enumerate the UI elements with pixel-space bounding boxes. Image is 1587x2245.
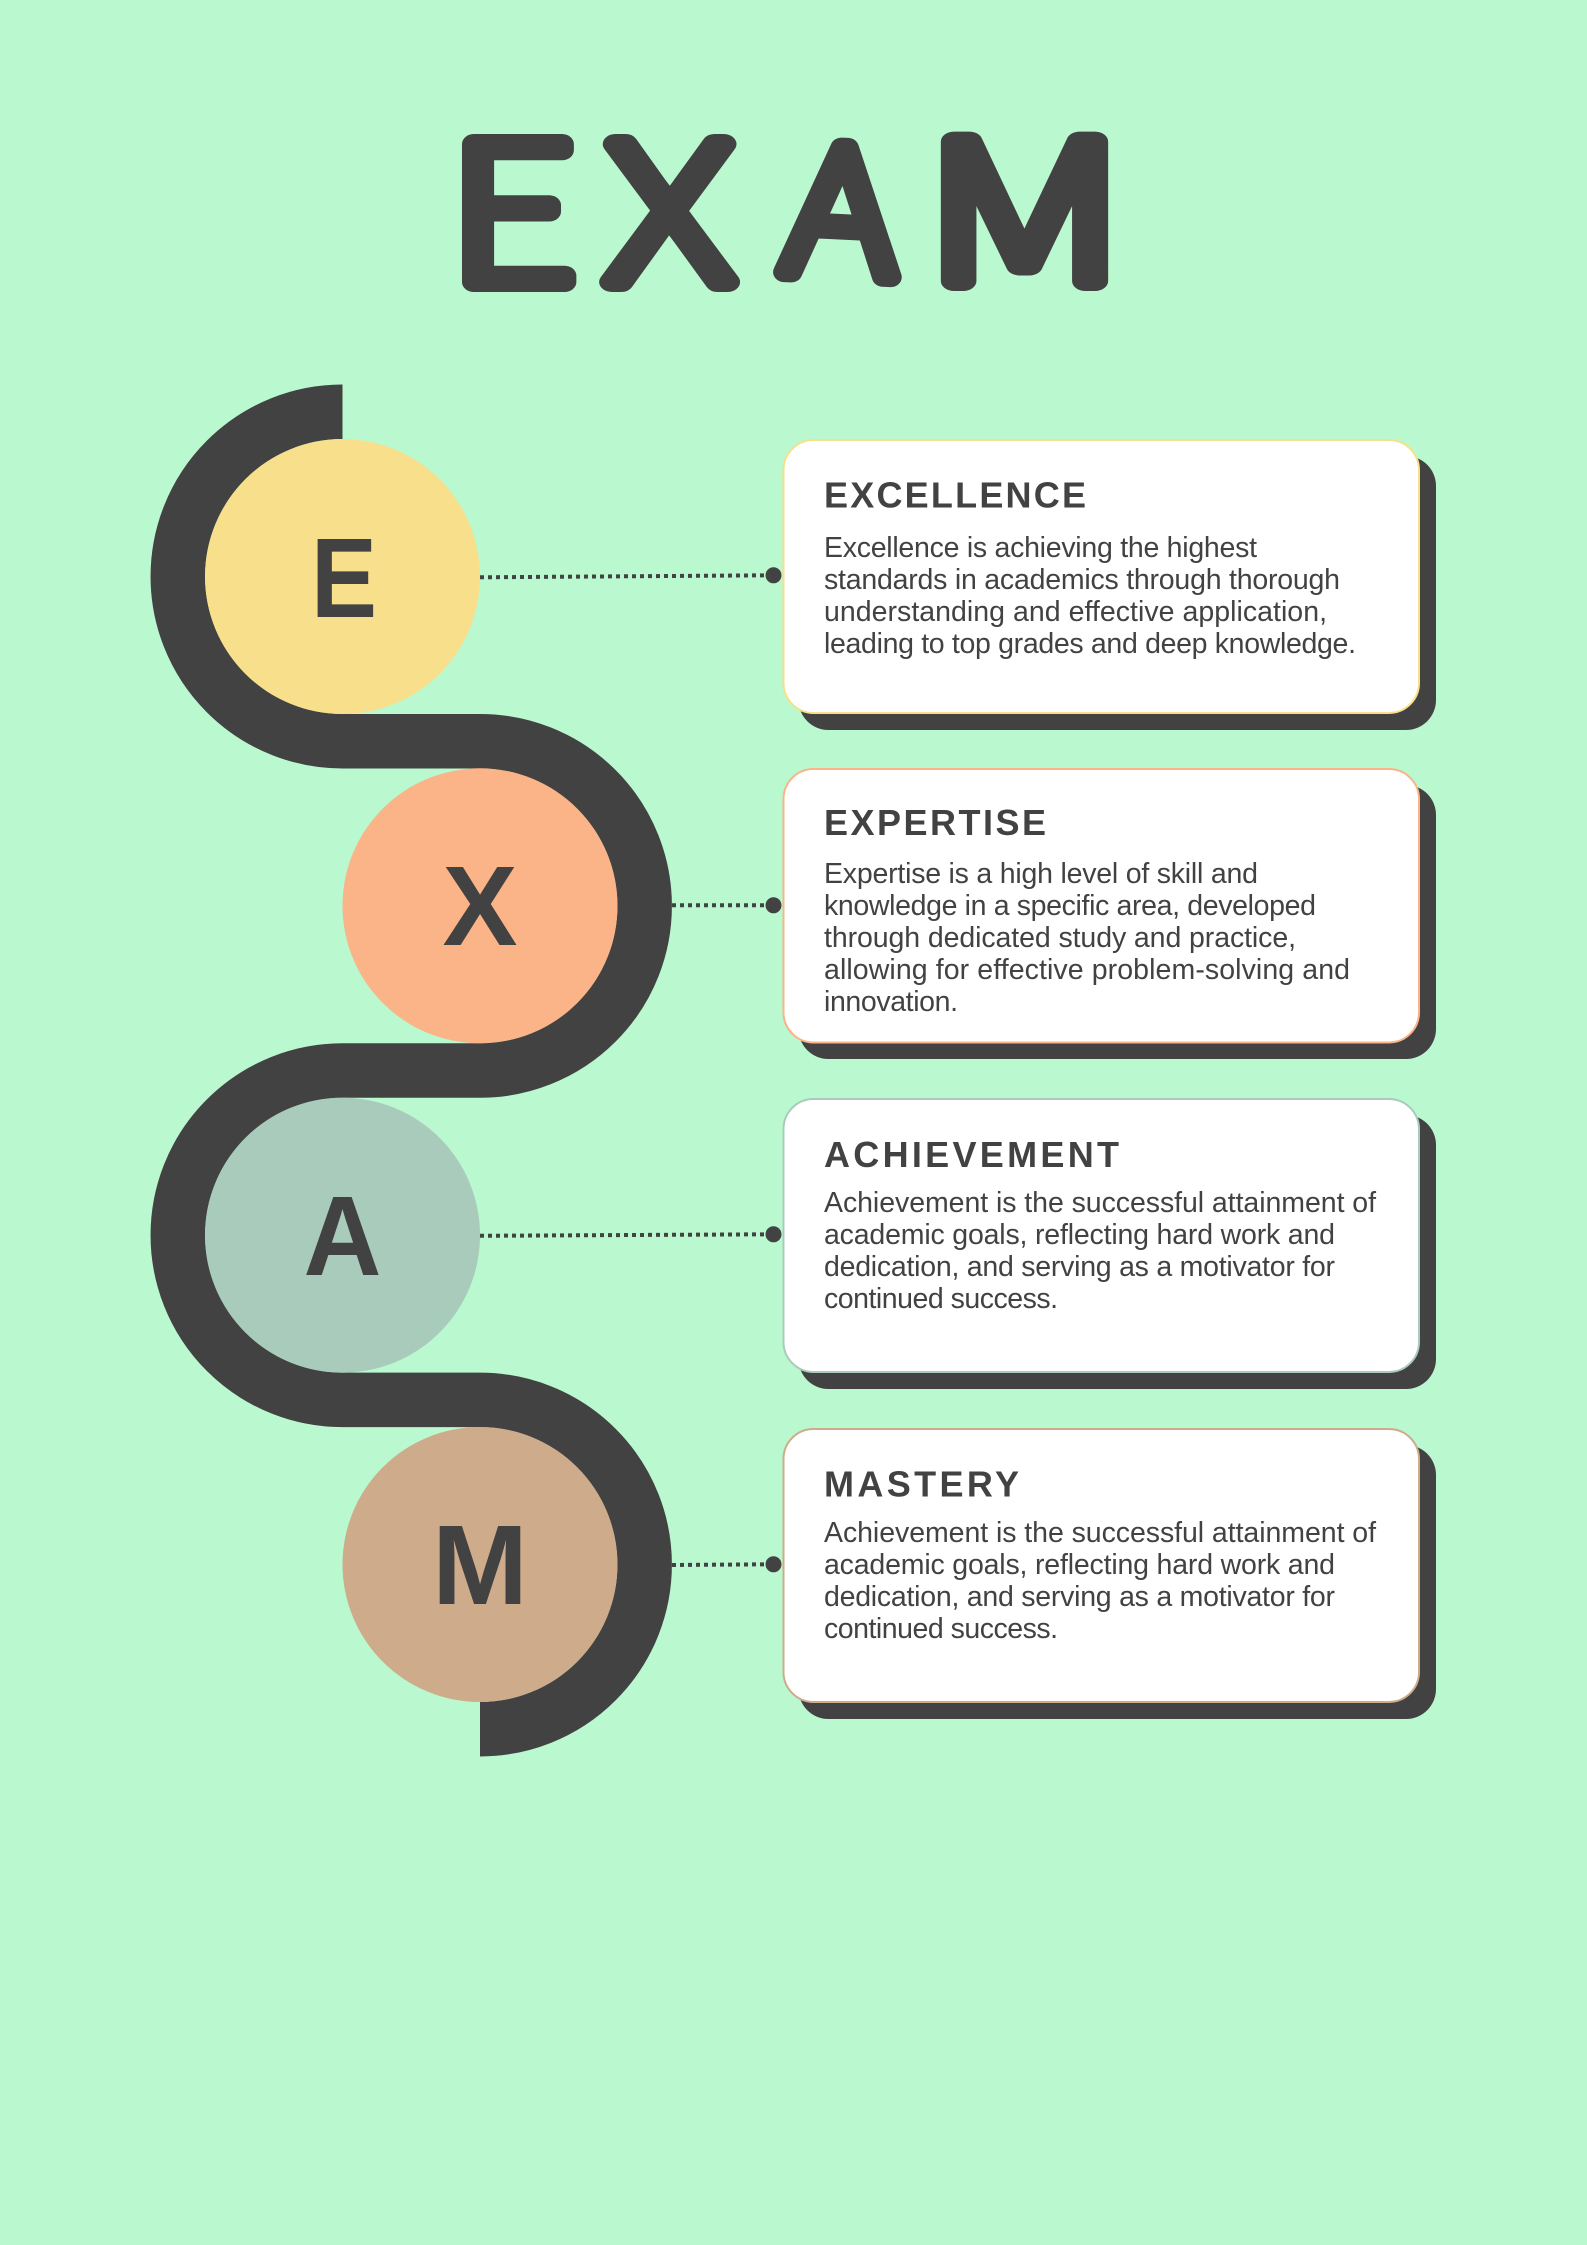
text: Expertise description: through dedicated study and practice, [824, 922, 1296, 954]
text: Mastery description [824, 1517, 1376, 1645]
circle: X [342, 768, 618, 1043]
circle: E: E [311, 515, 377, 641]
text: Mastery description: Achievement is the successful attainment of [824, 1517, 1376, 1549]
serpentine path [178, 412, 645, 1729]
heading: Mastery: MASTERY [824, 1464, 1019, 1504]
heading: Achievement: ACHIEVEMENT [824, 1134, 1119, 1175]
title: X [607, 62, 732, 337]
panel: Achievement [784, 1099, 1436, 1389]
title: A [779, 70, 903, 329]
circle: E [205, 439, 480, 714]
text: Mastery description: dedication, and serving as a motivator for [824, 1581, 1336, 1613]
heading: Expertise: EXPERTISE [824, 802, 1046, 843]
connector: E to Excellence [480, 567, 782, 583]
circle: X: X [442, 843, 518, 969]
text: Expertise description: knowledge in a specific area, developed [824, 890, 1316, 922]
connector: X to Expertise [672, 897, 782, 913]
circle: A [205, 1098, 480, 1373]
title: M [926, 59, 1123, 337]
text: Achievement description: Achievement is the successful attainment of [824, 1187, 1376, 1219]
text: Excellence description: leading to top grades and deep knowledge. [824, 628, 1356, 660]
text: Excellence description [824, 532, 1356, 660]
connector: M to Mastery [672, 1556, 782, 1572]
panel: Excellence [784, 440, 1436, 730]
text: Excellence description: understanding and effective application, [824, 596, 1327, 628]
text: Achievement description: academic goals, reflecting hard work and [824, 1219, 1335, 1251]
text: Mastery description: academic goals, reflecting hard work and [824, 1549, 1335, 1581]
text: Achievement description: dedication, and serving as a motivator for [824, 1251, 1336, 1283]
circle: M: M [432, 1502, 528, 1628]
heading: Excellence: EXCELLENCE [824, 474, 1086, 516]
text: Expertise description: Expertise is a high level of skill and [824, 858, 1258, 890]
text: Mastery description: continued success. [824, 1613, 1058, 1645]
circle: M [342, 1427, 618, 1702]
text: Expertise description: innovation. [824, 986, 958, 1018]
panel: Expertise [784, 769, 1436, 1059]
text: Excellence description: standards in academics through thorough [824, 564, 1340, 596]
text: Achievement description [824, 1187, 1376, 1315]
text: Achievement description: continued success. [824, 1283, 1058, 1315]
circle: A: A [304, 1173, 382, 1299]
text: Excellence description: Excellence is achieving the highest [824, 532, 1257, 564]
connector: A to Achievement [480, 1226, 782, 1242]
text: Expertise description [824, 858, 1350, 1018]
title: E [449, 62, 576, 337]
text: Expertise description: allowing for effective problem-solving and [824, 954, 1350, 986]
panel: Mastery [784, 1429, 1436, 1719]
